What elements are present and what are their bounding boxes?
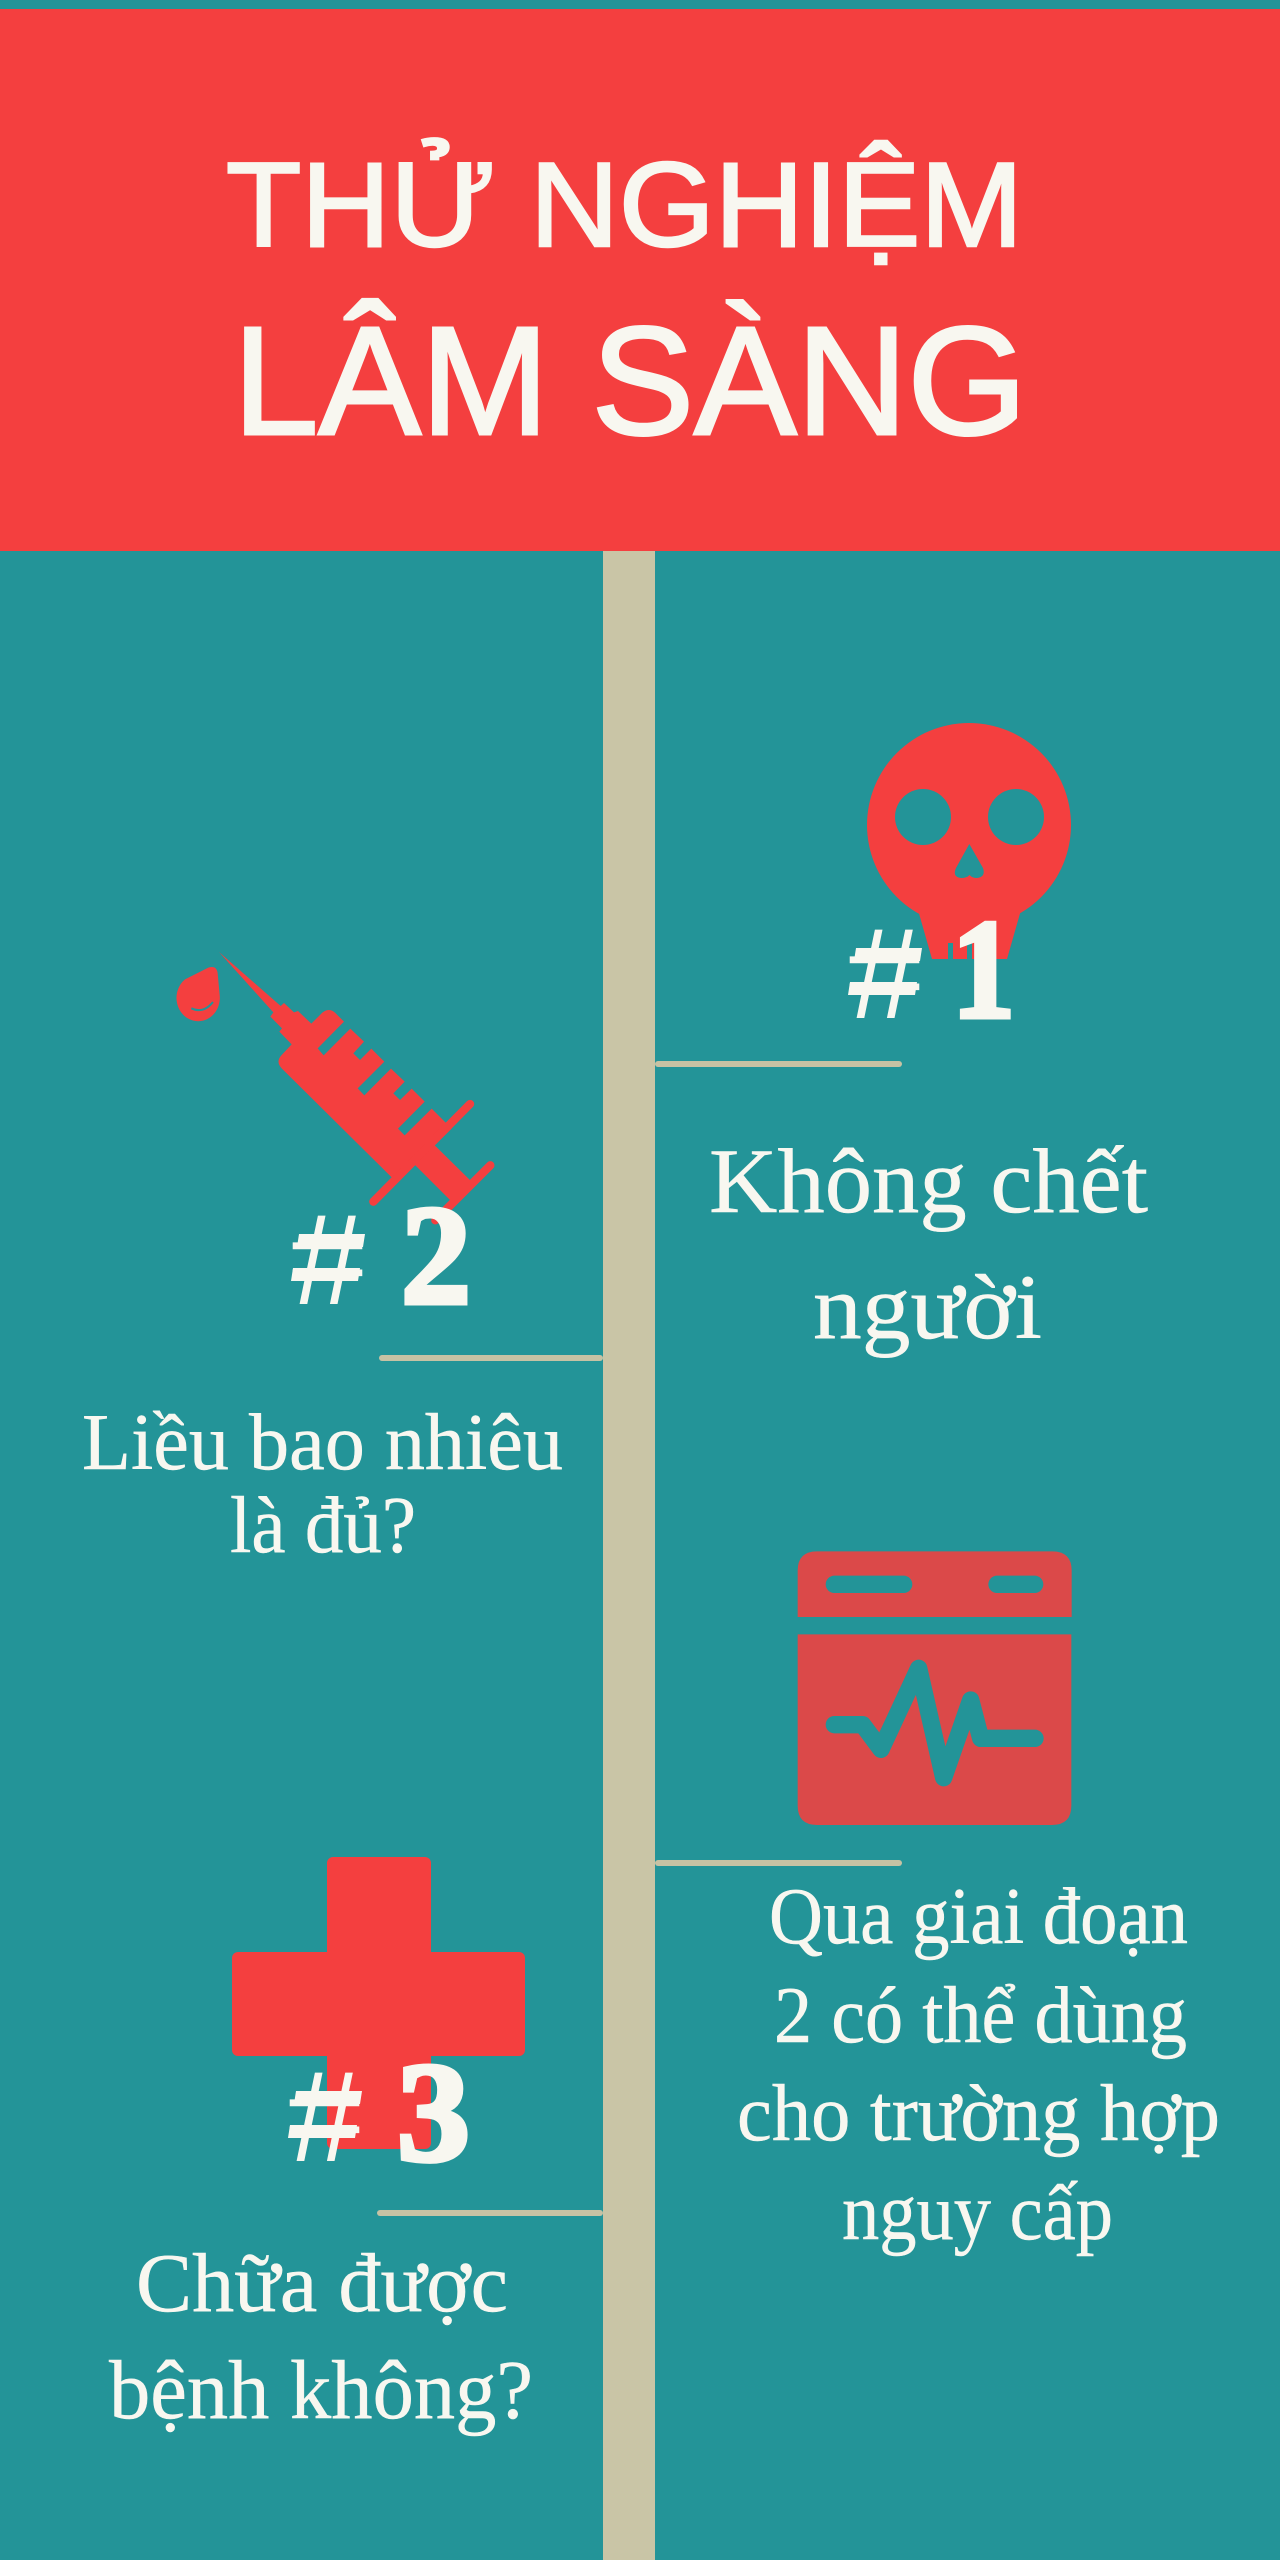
connector line 4 — [655, 1860, 902, 1866]
connector line 3 — [377, 2210, 603, 2216]
text: chữa được bệnh không — [109, 2237, 533, 2437]
text: không chết người — [709, 1130, 1148, 1358]
number 3: 3 — [397, 2033, 470, 2191]
text: liều bao nhiêu là đủ: Liều bao nhiêu — [82, 1399, 563, 1487]
icon: syringe — [176, 952, 490, 1220]
text: không chết người: Không chết — [709, 1130, 1148, 1232]
header banner — [0, 9, 1280, 551]
number 1 — [847, 890, 1015, 1048]
number 1: 1 — [952, 890, 1015, 1048]
text: qua giai đoạn 2: nguy cấp — [842, 2169, 1113, 2257]
icon: skull — [867, 723, 1071, 960]
text: qua giai đoạn 2: cho trường hợp — [737, 2070, 1220, 2158]
number 3: # — [287, 2042, 362, 2191]
text: qua giai đoạn 2 — [737, 1873, 1220, 2257]
number 3 — [287, 2033, 470, 2191]
text: qua giai đoạn 2: 2 có thể dùng — [774, 1972, 1187, 2060]
number 1: # — [847, 899, 922, 1048]
connector line 2 — [379, 1355, 603, 1361]
text: chữa được bệnh không: bệnh không? — [109, 2344, 533, 2437]
icon: monitor with heartbeat — [798, 1551, 1072, 1825]
number 2: # — [290, 1185, 365, 1334]
number 2: 2 — [401, 1176, 471, 1334]
text: qua giai đoạn 2: Qua giai đoạn — [769, 1873, 1188, 1961]
text: không chết người: người — [813, 1256, 1042, 1358]
number 2 — [290, 1176, 471, 1334]
title line 2: LÂM SÀNG — [233, 295, 1027, 467]
connector line 1 — [655, 1061, 902, 1067]
central timeline pole — [603, 551, 655, 2560]
text: chữa được bệnh không: Chữa được — [136, 2237, 508, 2330]
title line 1: THỬ NGHIỆM — [226, 137, 1023, 272]
text: liều bao nhiêu là đủ — [82, 1399, 563, 1570]
text: liều bao nhiêu là đủ: là đủ? — [230, 1482, 416, 1570]
icon: medical cross — [232, 1857, 525, 2149]
